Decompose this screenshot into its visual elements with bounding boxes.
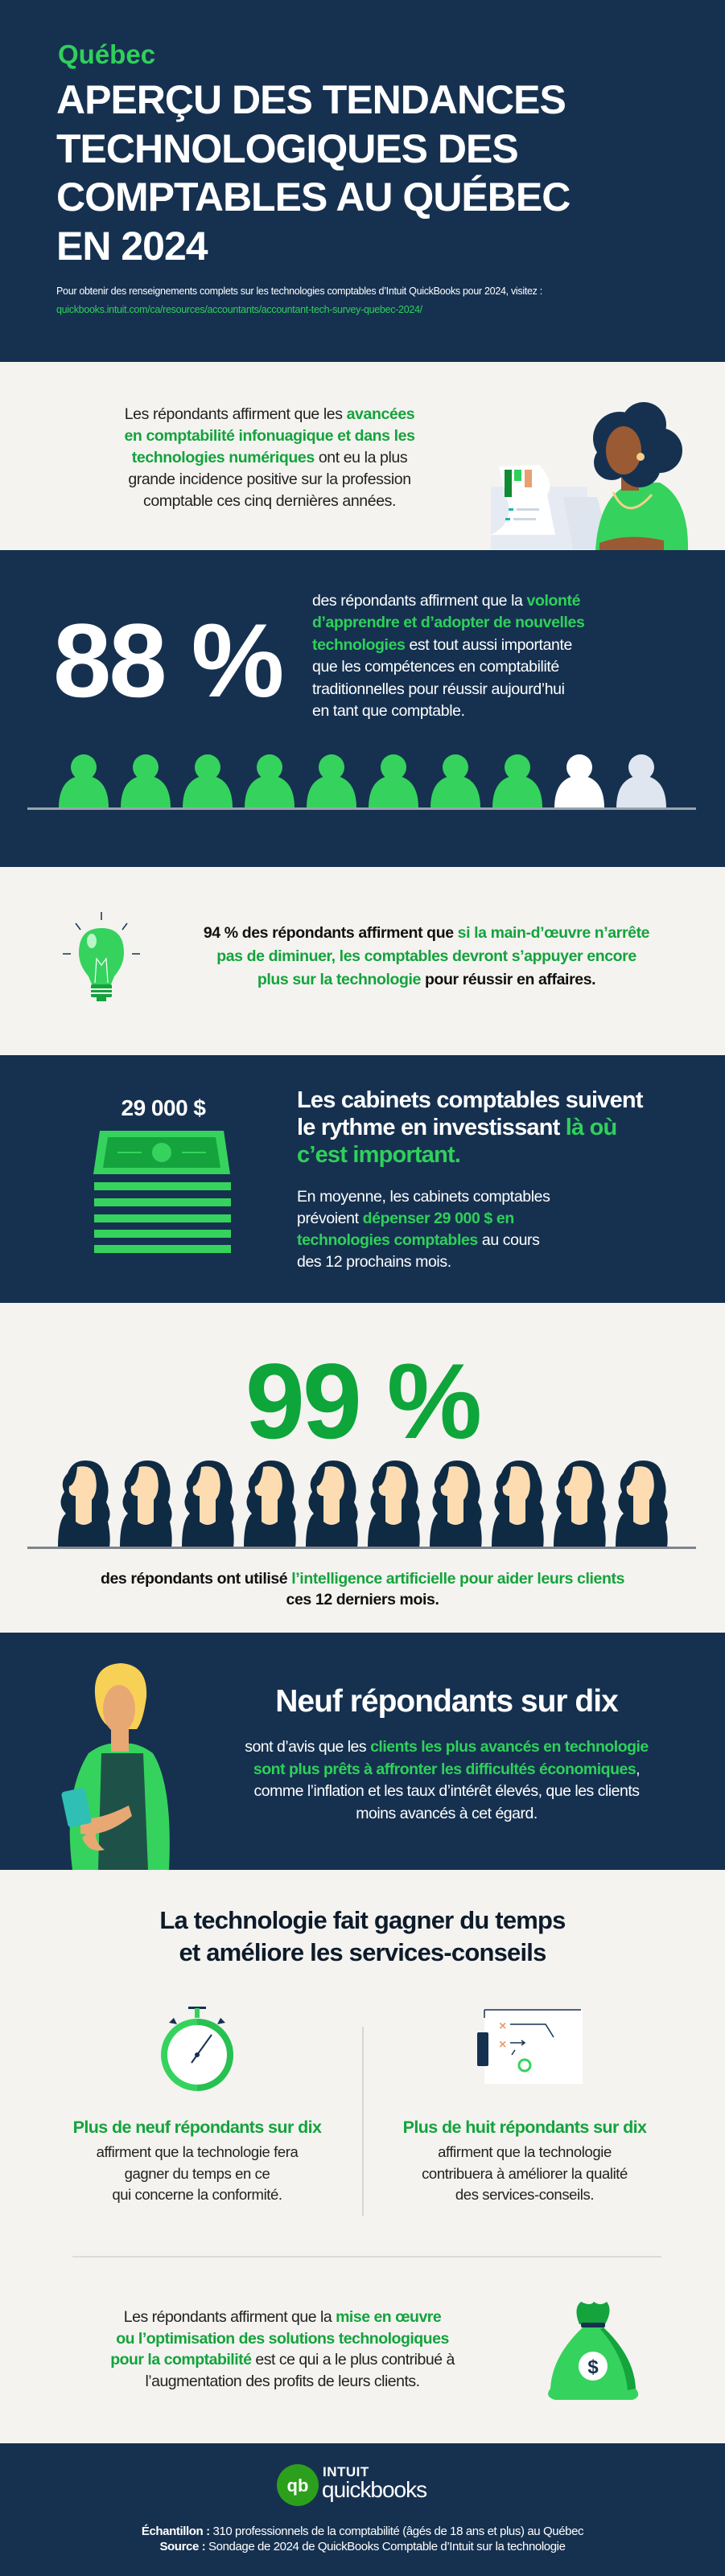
text block: profits: l’augmentation des profits de leurs clients. [145, 2373, 420, 2390]
sample and source [142, 2524, 584, 2553]
title: COMPTABLES AU QUÉBEC [56, 175, 570, 220]
panel: header [0, 0, 725, 362]
heading: et améliore les services-conseils [179, 1938, 546, 1966]
panel: 88% [0, 550, 725, 867]
divider [362, 2027, 364, 2216]
amount label: 29 000 $ [121, 1095, 206, 1120]
divider horizontal [72, 2256, 661, 2258]
column: advisory [403, 2118, 647, 2203]
body [97, 2143, 299, 2203]
icon: strategy board: × [499, 2038, 506, 2052]
stat description: traditionnelles pour réussir aujourd’hui [312, 680, 565, 698]
pictogram: 10 women [27, 1461, 696, 1549]
description: comme l’inflation et les taux d’intérêt élevés, que les clients [253, 1782, 639, 1800]
heading [159, 1906, 566, 1966]
region label: Québec [58, 39, 155, 69]
intro text with link [56, 286, 542, 315]
heading: Neuf répondants sur dix [275, 1684, 618, 1719]
body: des services-conseils. [455, 2186, 594, 2203]
panel: labour shortage [0, 867, 725, 1055]
text block: technologies numériques ont eu la plus [132, 449, 407, 466]
text block: grande incidence positive sur la profession [128, 470, 411, 488]
body [422, 2143, 628, 2203]
description: En moyenne, les cabinets comptables [297, 1188, 550, 1206]
description: sont plus prêts à affronter les difficultés économiques, [253, 1760, 640, 1778]
big stat 99 %: 99 % [245, 1342, 480, 1461]
text block: profits: ou l’optimisation des solutions technologiques [116, 2330, 449, 2348]
logo: intuit quickbooks [277, 2464, 426, 2506]
text block [204, 924, 649, 988]
logo: intuit quickbooks: INTUIT [323, 2464, 369, 2479]
stat description: des répondants ont utilisé l’intelligence artificielle pour aider leurs clients [101, 1570, 624, 1588]
stat description: des répondants affirment que la volonté [312, 592, 580, 610]
stat description: technologies est tout aussi importante [312, 636, 572, 654]
icon: stopwatch [161, 2007, 233, 2091]
heading: le rythme en investissant là où [297, 1115, 616, 1140]
text block: profits: pour la comptabilité est ce qui a le plus contribué à [110, 2351, 455, 2369]
body: gagner du temps en ce [125, 2165, 270, 2181]
description: sont d’avis que les clients les plus avancés en technologie [245, 1738, 649, 1756]
column: compliance [73, 2118, 322, 2203]
text block [124, 405, 415, 510]
logo: intuit quickbooks: qb [287, 2475, 308, 2496]
body: affirment que la technologie fera [97, 2143, 298, 2160]
icon: strategy board [477, 2009, 583, 2084]
sample and source: Source : Sondage de 2024 de QuickBooks Comptable d’Intuit sur la technologie [159, 2540, 566, 2553]
stat description [312, 592, 584, 720]
illustration: woman with tablet [61, 1663, 170, 1870]
panel: nine out of ten [0, 1633, 725, 1870]
icon: light bulb [63, 912, 140, 1001]
text block: comptable ces cinq dernières années. [143, 492, 396, 510]
icon: strategy board: × [499, 2019, 506, 2033]
stat description: que les compétences en comptabilité [312, 658, 559, 676]
text block: en comptabilité infonuagique et dans les [124, 427, 415, 445]
body: qui concerne la conformité. [112, 2186, 282, 2203]
heading [297, 1087, 644, 1168]
icon: money stack [93, 1131, 231, 1253]
illustration: woman at laptop [491, 402, 689, 550]
heading: Les cabinets comptables suivent [297, 1087, 643, 1113]
title: EN 2024 [56, 224, 208, 269]
heading: La technologie fait gagner du temps [159, 1906, 566, 1934]
heading: c’est important. [297, 1142, 460, 1168]
body: contribuera à améliorer la qualité [422, 2165, 628, 2181]
sample and source: Échantillon : 310 professionnels de la comptabilité (âgés de 18 ans et plus) au Québec [142, 2525, 583, 2538]
title: TECHNOLOGIQUES DES [56, 125, 518, 171]
panel: 99% AI [0, 1303, 725, 1633]
text block: profits [110, 2308, 455, 2390]
text block: profits: Les répondants affirment que la mise en œuvre [124, 2308, 441, 2326]
body: affirment que la technologie [438, 2143, 612, 2160]
description [245, 1738, 649, 1822]
description [297, 1188, 550, 1271]
intro text with link: Pour obtenir des renseignements complets sur les technologies comptables d’Intuit QuickBooks pour 2024, visitez : [56, 286, 542, 297]
panel: technology saves time [0, 1870, 725, 2443]
text block: 94 % des répondants affirment que si la main-d’œuvre n’arrête [204, 924, 649, 942]
stat description: ces 12 derniers mois. [286, 1591, 439, 1608]
stat description: en tant que comptable. [312, 702, 465, 720]
icon: money bag: $ [587, 2356, 599, 2378]
big stat 88 %: 88 % [53, 602, 282, 719]
description: technologies comptables au cours [297, 1231, 539, 1249]
intro text with link: quickbooks.intuit.com/ca/resources/accountants/accountant-tech-survey-quebec-2024/ [56, 304, 422, 315]
text block: plus sur la technologie pour réussir en affaires. [257, 971, 595, 988]
description: moins avancés à cet égard. [356, 1805, 538, 1822]
stat description: d’apprendre et d’adopter de nouvelles [312, 614, 584, 631]
subheading: Plus de neuf répondants sur dix [73, 2118, 321, 2137]
description: des 12 prochains mois. [297, 1253, 451, 1271]
icon: money bag [548, 2302, 639, 2400]
text block: Les répondants affirment que les avancées [125, 405, 414, 423]
title [56, 77, 570, 269]
subheading: Plus de huit répondants sur dix [403, 2118, 646, 2137]
stat description [101, 1570, 624, 1608]
text block: pas de diminuer, les comptables devront s’appuyer encore [216, 947, 636, 965]
panel: footer [0, 2443, 725, 2576]
title: APERÇU DES TENDANCES [56, 77, 566, 122]
panel: cloud accounting impact [0, 362, 725, 550]
pictogram: 10 people [27, 754, 696, 810]
panel: investment [0, 1055, 725, 1303]
logo: intuit quickbooks: quickbooks [322, 2477, 426, 2502]
description: prévoient dépenser 29 000 $ en [297, 1210, 514, 1227]
